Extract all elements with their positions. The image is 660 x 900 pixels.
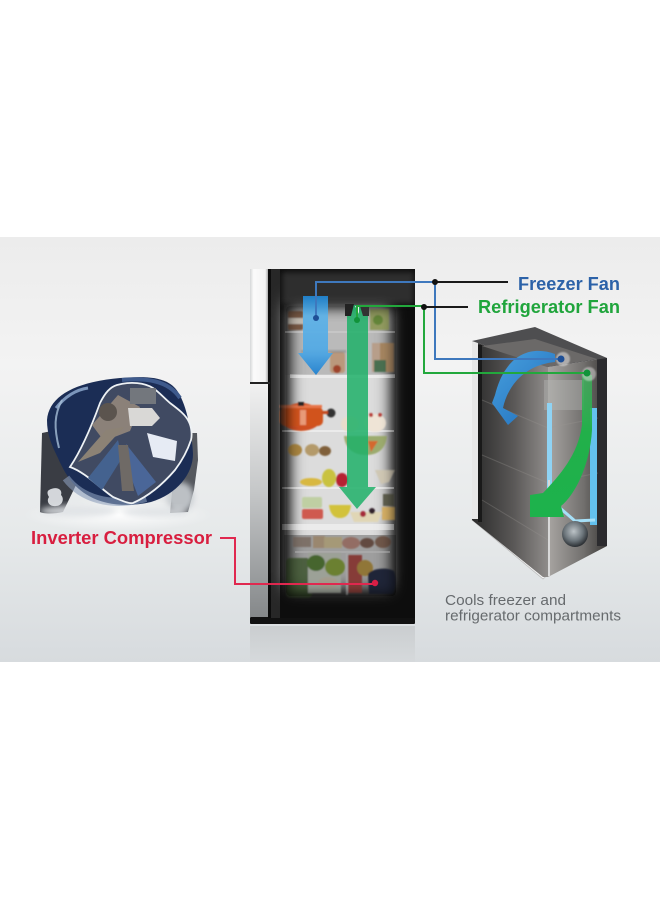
fruit (322, 469, 336, 487)
fridge reflection (250, 626, 415, 662)
refrigerator fan (345, 304, 354, 316)
label: freezer fan: Freezer Fan (518, 273, 620, 294)
right mounting foot (170, 433, 198, 513)
salad bowl (344, 436, 387, 455)
fridge door edge upper (250, 269, 268, 382)
red pot (280, 403, 322, 431)
food items (280, 309, 396, 598)
green airflow arrow (339, 305, 376, 509)
vegetable drawer (286, 558, 312, 598)
curved blue arrow (492, 351, 555, 425)
interior light (287, 300, 393, 590)
connector: refrigerator fan (354, 304, 590, 376)
refrigerator illustration (250, 269, 415, 648)
left mounting foot (40, 430, 76, 514)
mist wisps (40, 505, 116, 517)
fan glows (556, 352, 570, 366)
top face (472, 327, 607, 367)
connector: inverter compressor (220, 538, 378, 586)
containers (302, 497, 322, 508)
connector: freezer fan (313, 279, 564, 362)
mist (23, 499, 213, 531)
compressor shell (47, 377, 193, 505)
label: inverter compressor: Inverter Compressor (31, 528, 212, 548)
background panel (0, 237, 660, 662)
fridge door edge lower (250, 385, 268, 617)
jar (288, 311, 303, 330)
internal parts (92, 395, 140, 441)
fridge body (268, 269, 415, 618)
freezer packs (372, 343, 380, 372)
cabinet base trim (472, 514, 551, 579)
small dishes (288, 444, 302, 456)
curved green arrow (530, 375, 592, 517)
drawer food (293, 536, 391, 549)
cutaway interior (70, 383, 192, 503)
cutaway refrigerator diagram (472, 327, 607, 579)
blue airflow arrow (298, 296, 333, 375)
label: refrigerator fan: Refrigerator Fan (478, 296, 620, 317)
interior shelves (544, 380, 584, 410)
left face (472, 341, 548, 577)
bolt hole (48, 488, 63, 506)
right face (548, 358, 607, 577)
front edge (548, 480, 550, 576)
compressor ball (562, 521, 588, 547)
compressor illustration (23, 377, 213, 531)
salad box (370, 309, 389, 330)
caption: refrigerator compartments (445, 608, 621, 624)
interior vignette (280, 270, 415, 604)
fridge feet (250, 617, 415, 624)
cakes (341, 416, 359, 432)
caption: Cools freezer and (445, 592, 566, 609)
shelves (282, 331, 395, 553)
